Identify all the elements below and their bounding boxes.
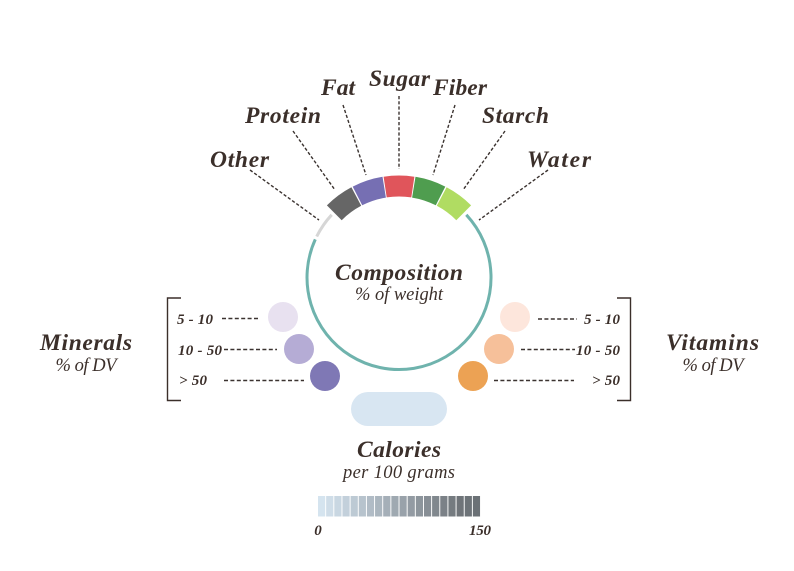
minerals scale labels: > 50 — [179, 373, 208, 389]
vitamins legend — [458, 298, 759, 400]
category labels: Water — [527, 147, 592, 173]
vitamins scale labels: 10 - 50 — [576, 343, 620, 359]
scale labels: 150 — [469, 523, 492, 539]
leader lines — [250, 96, 548, 220]
minerals scale labels — [177, 312, 222, 389]
minerals heading — [39, 330, 132, 376]
category labels: Other — [210, 147, 270, 173]
composition arc segments — [327, 176, 471, 220]
category labels: Fat — [320, 75, 356, 101]
scale labels — [314, 523, 492, 539]
calories heading: Calories — [357, 437, 441, 463]
minerals bracket — [168, 298, 181, 400]
composition title — [335, 260, 463, 305]
segment: fat — [353, 177, 386, 205]
composition title: Composition — [335, 260, 463, 286]
segment: sugar — [384, 176, 414, 197]
calories heading: per 100 grams — [341, 463, 455, 483]
minerals heading: Minerals — [39, 330, 132, 356]
minerals scale labels: 5 - 10 — [177, 312, 214, 328]
vitamins scale labels: 5 - 10 — [584, 312, 620, 328]
segment: protein — [327, 187, 361, 220]
vitamins circles — [458, 302, 530, 391]
category labels: Starch — [482, 103, 549, 129]
minerals heading: % of DV — [56, 356, 119, 376]
scale labels: 0 — [314, 523, 322, 539]
vitamins bracket — [617, 298, 630, 400]
minerals dashes — [222, 318, 304, 380]
vitamins heading: % of DV — [682, 356, 746, 376]
minerals circles — [268, 302, 340, 391]
minerals scale labels: 10 - 50 — [178, 343, 222, 359]
composition ring — [307, 215, 491, 370]
category labels: Sugar — [369, 66, 431, 92]
category labels — [210, 66, 592, 173]
calories heading — [341, 437, 455, 483]
vitamins heading — [666, 330, 759, 376]
vitamins dashes — [494, 319, 577, 380]
vitamins scale labels — [576, 312, 620, 389]
vitamins heading: Vitamins — [666, 330, 759, 356]
category labels: Fiber — [432, 75, 488, 101]
minerals legend — [39, 298, 340, 400]
segment: fiber — [412, 177, 445, 205]
category labels: Protein — [244, 103, 321, 129]
calories scale — [318, 496, 480, 516]
composition title: % of weight — [355, 285, 444, 305]
vitamins scale labels: > 50 — [592, 373, 620, 389]
calories pill — [351, 392, 447, 426]
segment: starch — [437, 187, 471, 220]
